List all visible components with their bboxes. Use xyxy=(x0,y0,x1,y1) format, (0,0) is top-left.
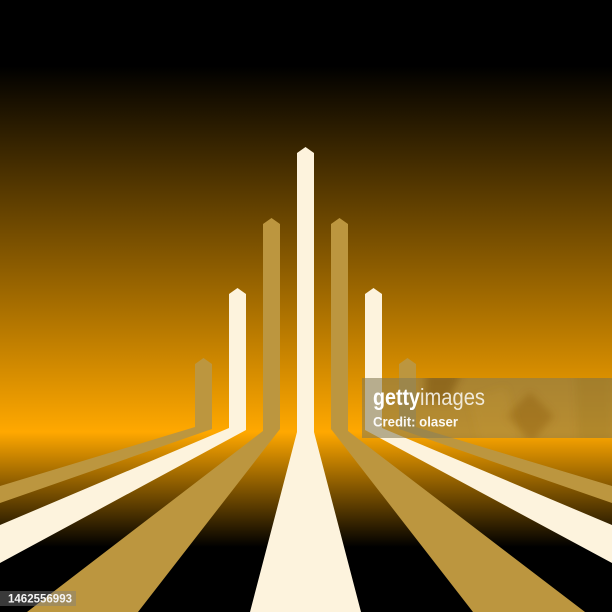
image id text: 1462556993 xyxy=(8,594,72,606)
watermark logo text: images xyxy=(420,384,485,410)
arrow: right cream xyxy=(365,288,612,563)
background: sky gradient xyxy=(0,0,612,433)
watermark logo text xyxy=(373,384,485,410)
watermark credit text: Credit: olaser xyxy=(373,414,459,430)
background: ground gradient xyxy=(0,432,612,612)
arrow: far right tan xyxy=(399,358,612,503)
arrow: far left tan xyxy=(0,358,212,503)
arrow: center cream xyxy=(250,147,361,612)
watermark logo text: getty xyxy=(373,384,420,410)
watermark band xyxy=(362,378,612,438)
arrow: left tan xyxy=(27,218,280,612)
image id badge xyxy=(0,591,76,606)
arrow: left cream xyxy=(0,288,246,563)
arrow: right tan xyxy=(331,218,585,612)
